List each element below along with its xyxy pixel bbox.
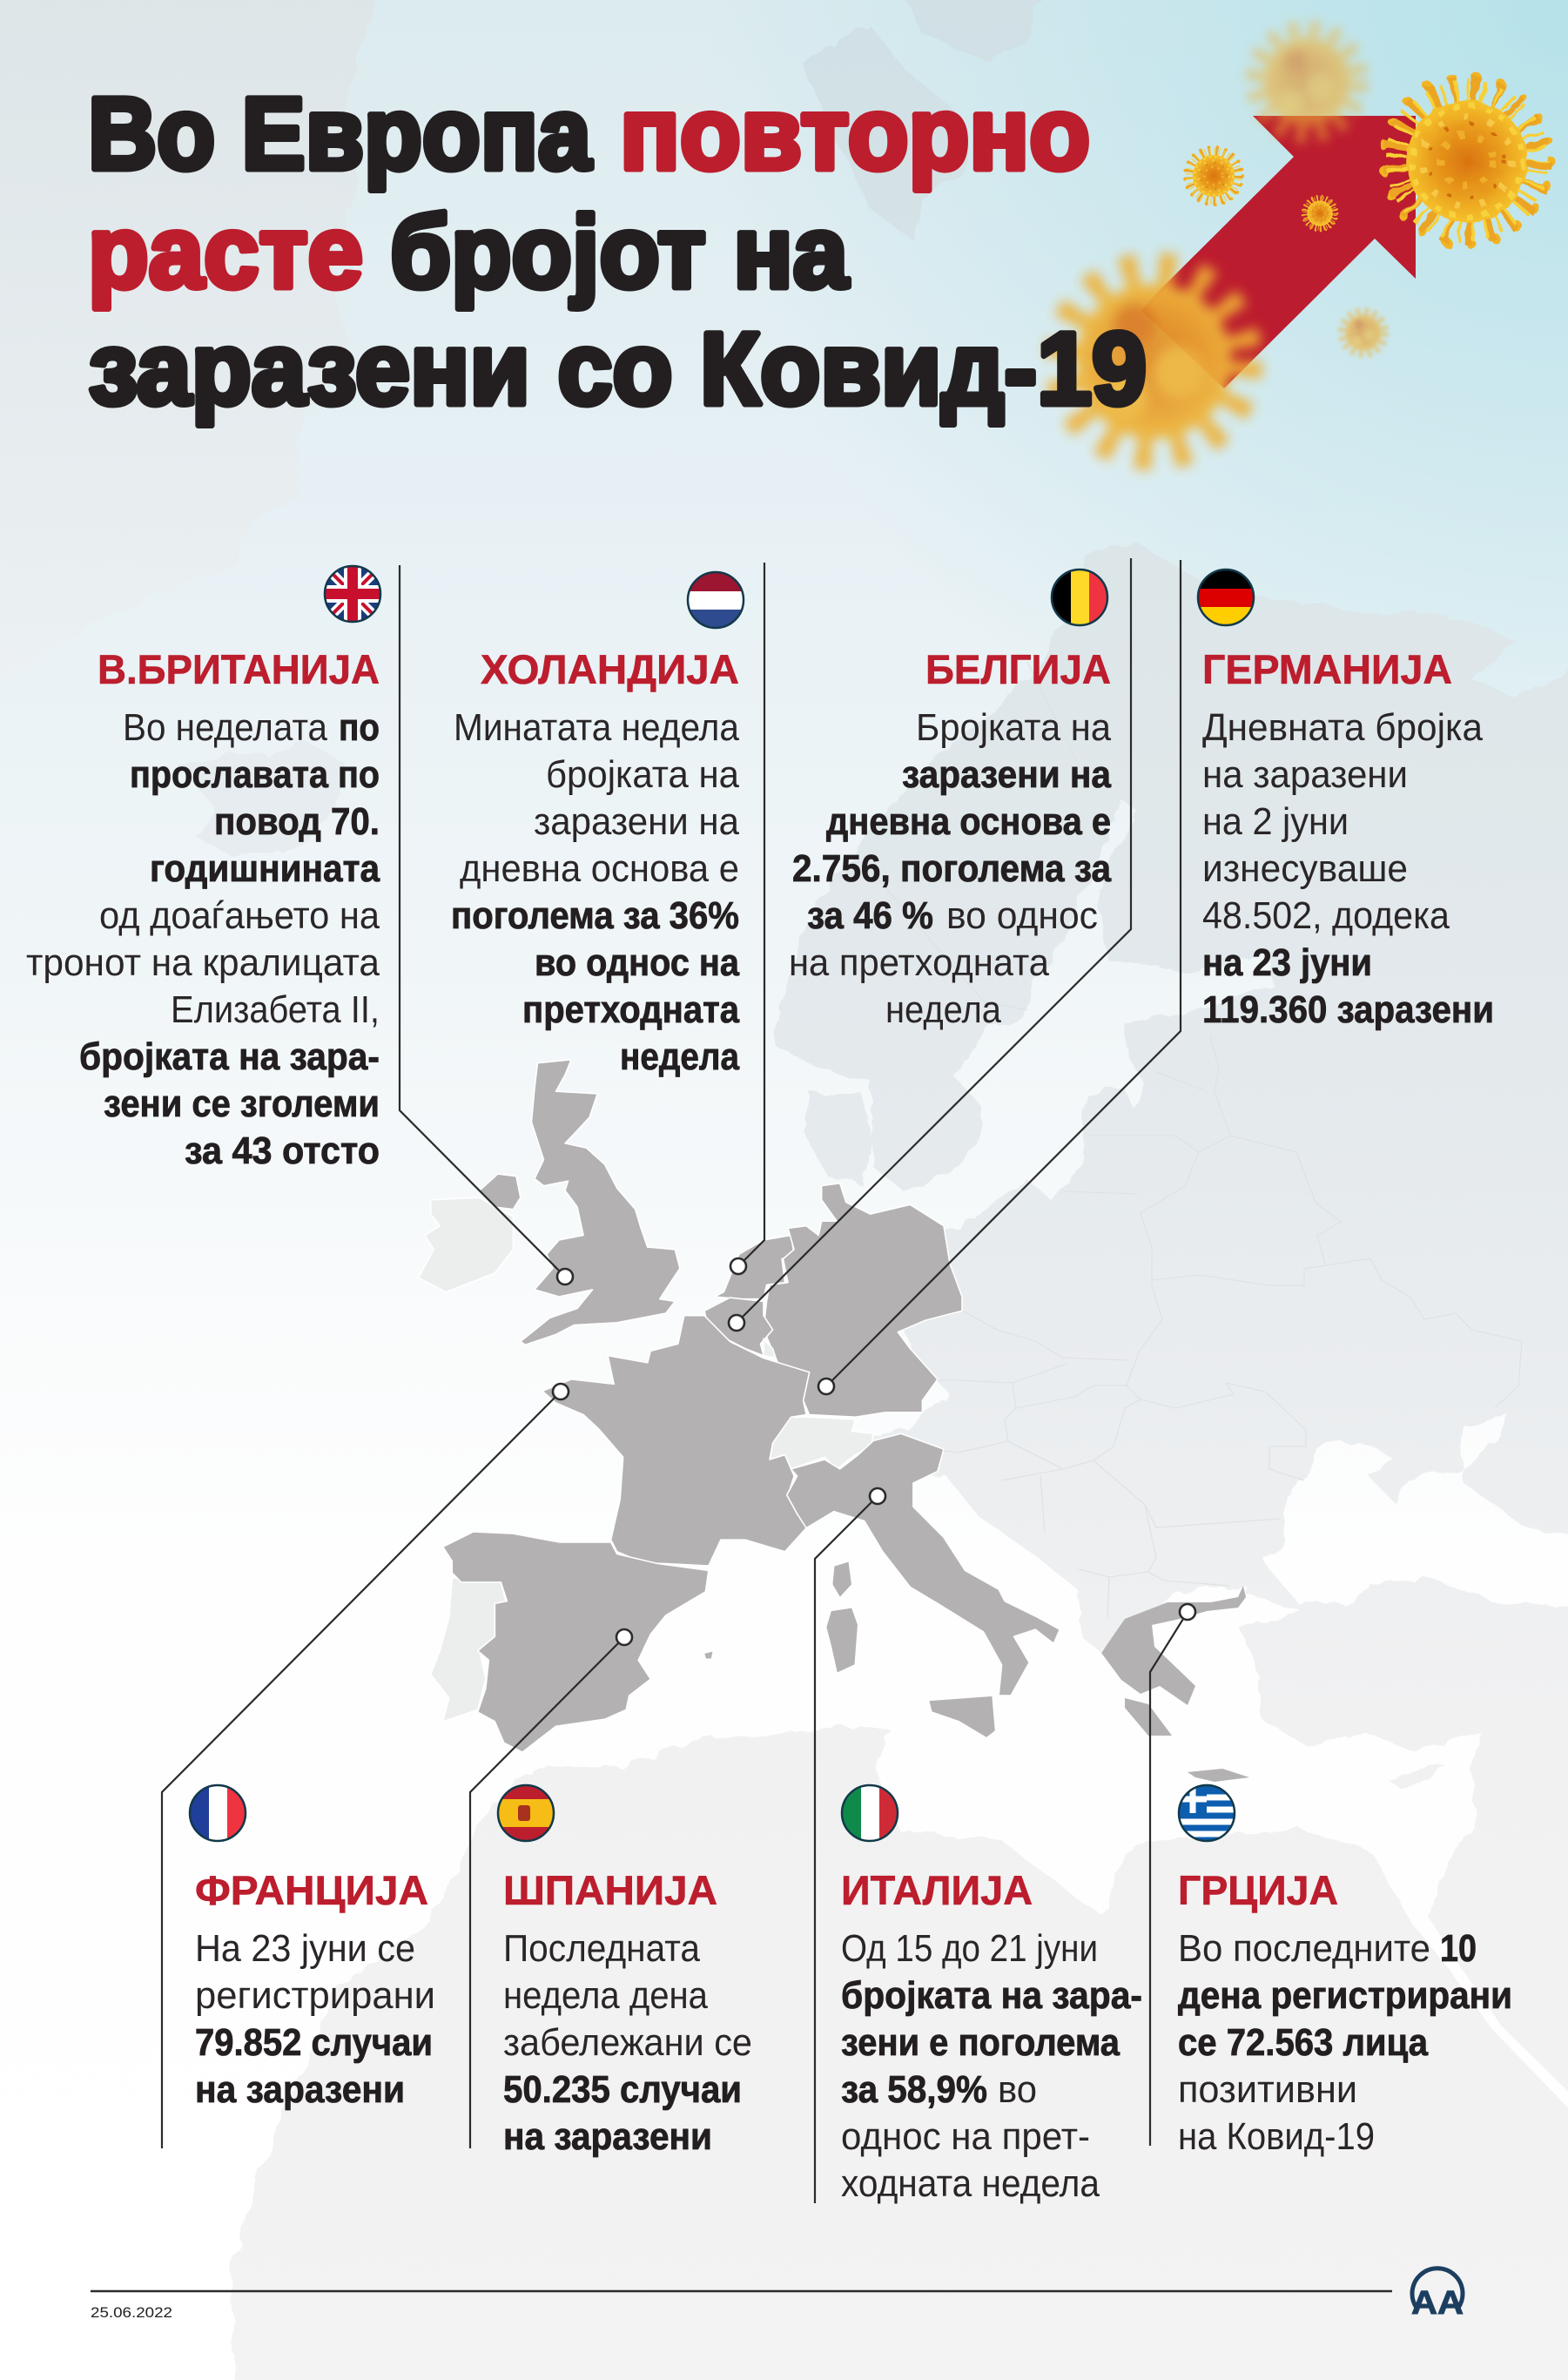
- text block: [789, 706, 1111, 1031]
- leader: Belgium: [729, 558, 1131, 1331]
- text block: [503, 1927, 752, 2158]
- Netherlands: [715, 1236, 794, 1299]
- leader: Greece: [1150, 1604, 1195, 2146]
- panel: France: [190, 1785, 435, 2111]
- text block: за 46 %: [807, 894, 933, 937]
- Crete: [1188, 1769, 1249, 1782]
- text block: Бројката на: [916, 706, 1111, 749]
- countries traced from the map: [419, 1060, 1060, 1752]
- icon: red arrow: [1141, 116, 1416, 388]
- text block: регистрирани: [195, 1974, 435, 2017]
- text block: бројката на: [546, 753, 740, 796]
- panel: Spain: [498, 1785, 752, 2158]
- small virus: [1185, 147, 1242, 205]
- small virus on arrow: [1302, 196, 1337, 231]
- text block: [26, 706, 380, 1172]
- text block: недела: [885, 988, 1001, 1031]
- text block: изнесуваше: [1202, 847, 1408, 890]
- text block: [1178, 1927, 1512, 2158]
- title: повторно: [620, 77, 1090, 192]
- text block: [1202, 706, 1494, 1031]
- heading: БЕЛГИЈА: [925, 646, 1111, 692]
- text block: Дневната бројка: [1202, 706, 1483, 749]
- panel: Germany: [1198, 570, 1494, 1031]
- text block: на заразени: [503, 2115, 712, 2158]
- title line three, over the virus: заразени со Ковид-19: [89, 312, 1147, 427]
- text block: на 23 јуни: [1202, 941, 1372, 984]
- text block: на Ковид-19: [1178, 2115, 1375, 2158]
- text block: [195, 1927, 435, 2111]
- blurred virus at arrow top: [1256, 31, 1357, 132]
- heading: ШПАНИЈА: [503, 1867, 717, 1913]
- text block: во однос: [946, 894, 1098, 937]
- icon: Belgian flag: [1052, 570, 1107, 625]
- text block: се 72.563 лица: [1178, 2021, 1428, 2064]
- text block: во: [998, 2068, 1037, 2111]
- Balearic islands: [703, 1651, 713, 1659]
- text block: зени се зголеми: [104, 1082, 380, 1125]
- text block: 119.360 заразени: [1202, 988, 1494, 1031]
- text block: за 58,9%: [841, 2068, 987, 2111]
- leader: France: [162, 1384, 569, 2148]
- blurred small virus: [1343, 312, 1384, 354]
- text block: забележани се: [503, 2021, 752, 2064]
- map of Europe with highlighted countries: [419, 1060, 1249, 1782]
- leader: Germany: [818, 560, 1181, 1394]
- Sicily: [928, 1696, 996, 1738]
- panel: Netherlands: [451, 572, 744, 1078]
- text block: 10: [1440, 1927, 1477, 1970]
- text block: бројката на зара-: [841, 1974, 1142, 2017]
- text block: дневна основа е: [826, 800, 1111, 843]
- icon: Spanish flag: [498, 1785, 554, 1841]
- Italy: [787, 1433, 1060, 1696]
- title: бројот на: [390, 195, 849, 310]
- icon: Greek flag: [1179, 1785, 1235, 1841]
- heading: ИТАЛИЈА: [841, 1867, 1033, 1913]
- heading: ХОЛАНДИЈА: [481, 646, 739, 692]
- text block: на заразени: [195, 2068, 405, 2111]
- text block: недела дена: [503, 1974, 708, 2017]
- title: Во Европа: [88, 77, 592, 192]
- text block: Минатата недела: [454, 706, 739, 749]
- Great Britain: [521, 1060, 680, 1345]
- text block: на заразени: [1202, 753, 1408, 796]
- text block: однос на прет-: [841, 2115, 1090, 2158]
- heading: В.БРИТАНИЈА: [98, 646, 380, 692]
- icon: AA logo: AA: [1411, 2285, 1464, 2322]
- text block: повод 70.: [214, 800, 380, 843]
- text block: зени е поголема: [841, 2021, 1120, 2064]
- heading: ГЕРМАНИЈА: [1202, 646, 1452, 692]
- Portugal: [431, 1578, 506, 1722]
- text block: 2.756, поголема за: [792, 847, 1111, 890]
- text block: Во последните: [1178, 1927, 1430, 1970]
- text block: на претходната: [789, 941, 1049, 984]
- Corsica: [832, 1561, 852, 1598]
- text block: 50.235 случаи: [503, 2068, 742, 2111]
- panel: Belgium: [789, 570, 1111, 1031]
- text block: по: [339, 706, 380, 749]
- text block: 48.502, додека: [1202, 894, 1450, 937]
- Greece: [1101, 1586, 1246, 1705]
- text block: 79.852 случаи: [195, 2021, 433, 2064]
- Switzerland: [770, 1417, 873, 1469]
- text block: позитивни: [1178, 2068, 1357, 2111]
- text block: Последната: [503, 1927, 700, 1970]
- text block: на 2 јуни: [1202, 800, 1349, 843]
- France: [542, 1316, 810, 1566]
- text block: претходната: [522, 988, 739, 1031]
- text block: недела: [620, 1035, 739, 1078]
- panel: Greece: [1178, 1785, 1512, 2158]
- leader: Netherlands: [730, 563, 764, 1274]
- date: 25.06.2022: [91, 2304, 172, 2321]
- leader: United Kingdom: [400, 565, 573, 1284]
- icon: Italian flag: [842, 1785, 898, 1841]
- leader: Spain: [470, 1629, 632, 2148]
- text block: годишнината: [150, 847, 380, 890]
- text block: тронот на кралицата: [26, 941, 380, 984]
- text block: Елизабета II,: [171, 988, 380, 1031]
- Spain: [443, 1532, 709, 1752]
- panel: United Kingdom: [26, 566, 380, 1172]
- title: [88, 77, 1090, 310]
- title: расте: [88, 195, 363, 310]
- text block: дневна основа е: [460, 847, 739, 890]
- leader lines with location dots: [162, 558, 1195, 2203]
- text block: заразени на: [534, 800, 739, 843]
- text block: Од 15 до 21 јуни: [841, 1927, 1098, 1970]
- leader: Italy: [815, 1488, 885, 2203]
- heading: ГРЦИЈА: [1178, 1867, 1338, 1913]
- text block: Во неделата: [123, 706, 327, 749]
- icon: French flag: [190, 1785, 246, 1841]
- illustration: red rising arrow with coronavirus particles: [1063, 31, 1551, 452]
- icon: UK flag: [325, 566, 380, 622]
- text block: во однос на: [535, 941, 739, 984]
- Belgium: [704, 1298, 773, 1356]
- text block: На 23 јуни се: [195, 1927, 415, 1970]
- text block: [841, 1927, 1142, 2205]
- text block: [451, 706, 740, 1078]
- text block: бројката на зара-: [79, 1035, 380, 1078]
- text block: за 43 отсто: [185, 1129, 380, 1172]
- Ireland: [419, 1197, 513, 1292]
- icon: German flag: [1198, 570, 1254, 625]
- text block: прославата по: [130, 753, 380, 796]
- Sardinia: [826, 1608, 858, 1674]
- Northern Ireland: [480, 1174, 521, 1210]
- text block: заразени на: [902, 753, 1111, 796]
- country borders of the faint map: [871, 662, 1522, 1619]
- icon: Dutch flag: [688, 572, 744, 628]
- icon: AA logo: [1411, 2269, 1464, 2322]
- text block: ходната недела: [841, 2162, 1100, 2205]
- Peloponnese: [1125, 1698, 1172, 1736]
- text block: дена регистрирани: [1178, 1974, 1512, 2017]
- panel: Italy: [841, 1785, 1142, 2205]
- text block: поголема за 36%: [451, 894, 739, 937]
- text block: од доаѓањето на: [99, 894, 380, 937]
- Germany: [764, 1183, 962, 1417]
- blurred virus over the arrow tail: [1063, 271, 1244, 452]
- Luxembourg: [764, 1339, 776, 1358]
- large virus: [1383, 78, 1551, 245]
- footer: [91, 2269, 1464, 2322]
- heading: ФРАНЦИЈА: [195, 1867, 428, 1913]
